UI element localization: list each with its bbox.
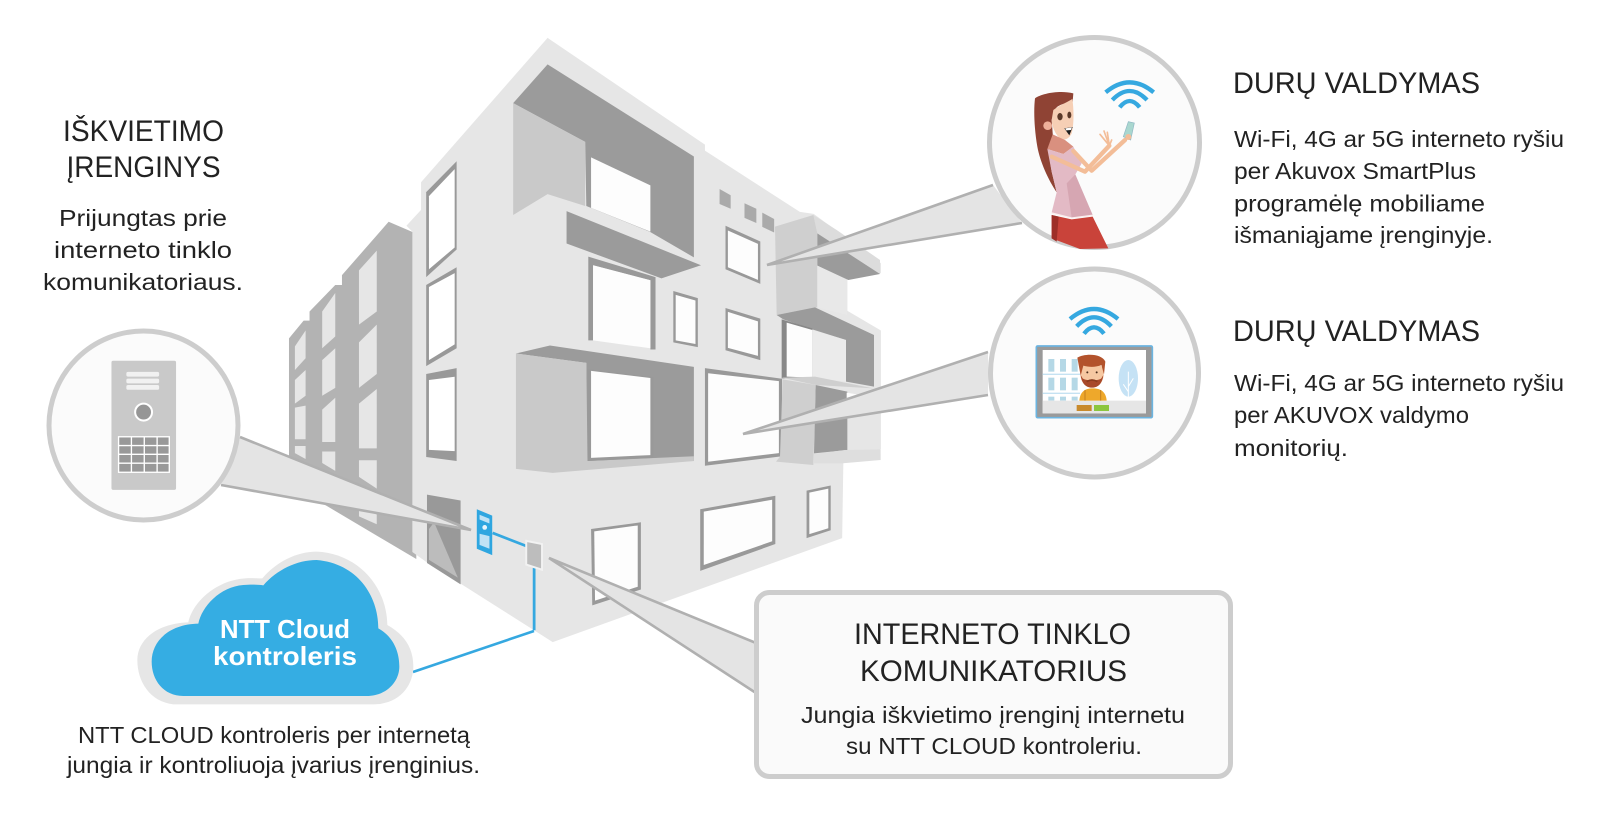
monitor frame and screen [1036, 346, 1152, 418]
right side balconies [775, 215, 881, 465]
heading: call device [63, 114, 224, 184]
heading: door control by monitor: DURŲ VALDYMAS [1233, 315, 1480, 348]
circle: woman with smartphone [990, 38, 1200, 249]
pointer: communicator callout [549, 558, 756, 693]
building illustration [289, 38, 881, 642]
description: NTT Cloud controller: NTT CLOUD kontroleris per internetą [78, 722, 470, 748]
ground floor windows [591, 486, 831, 605]
blue wiring inside building [493, 533, 534, 630]
description: call device: Prijungtas prie [59, 205, 227, 231]
small vents [720, 189, 774, 232]
line from building to cloud [413, 631, 534, 672]
description: call device: interneto tinklo [54, 237, 232, 263]
pointer: door intercom callout [221, 437, 471, 530]
description: door control by app: išmaniąjame įrenginyje. [1234, 222, 1493, 248]
description: door control by app: per Akuvox SmartPlus [1234, 158, 1476, 184]
circle: video monitor [990, 269, 1198, 477]
panel: internet communicator [756, 592, 1230, 776]
description: door control by app: programėlę mobiliame [1234, 190, 1485, 216]
background building [1043, 374, 1080, 393]
description: door control by monitor: per AKUVOX valdymo [1234, 402, 1469, 428]
heading: internet communicator: KOMUNIKATORIUS [860, 655, 1127, 688]
icon: woman holding phone with wifi [1034, 82, 1154, 249]
cloud label: NTT Cloud [220, 614, 350, 644]
description: door control by app [1234, 126, 1564, 248]
icon: door intercom [111, 361, 176, 490]
heading: call device: ĮRENGINYS [66, 151, 220, 184]
description: door control by monitor: Wi-Fi, 4G ar 5G interneto ryšiu [1234, 370, 1564, 396]
description: internet communicator [801, 702, 1185, 759]
top [1047, 147, 1093, 218]
cloud blue fill [152, 560, 399, 696]
description: internet communicator: Jungia iškvietimo įrenginį internetu [801, 702, 1185, 728]
description: call device: komunikatoriaus. [43, 269, 243, 295]
large window [705, 368, 782, 466]
skirt [1052, 215, 1108, 249]
heading: call device: IŠKVIETIMO [63, 114, 224, 148]
left column windows [426, 161, 457, 461]
description: door control by monitor [1234, 370, 1564, 461]
phone [1123, 122, 1134, 140]
pointer: monitor callout [743, 352, 988, 434]
tree [1119, 360, 1138, 397]
icon: indoor monitor [1036, 346, 1152, 418]
icon: wifi signal [1070, 309, 1118, 334]
description: call device [43, 205, 243, 295]
description: NTT Cloud controller: jungia ir kontroliuoja įvarius įrenginius. [66, 752, 480, 778]
heading: internet communicator: INTERNETO TINKLO [854, 618, 1131, 651]
heading: internet communicator [854, 618, 1131, 688]
neck and scarf [1047, 134, 1073, 154]
man on screen [1079, 388, 1107, 401]
face [1052, 99, 1074, 140]
bottom bar with buttons [1043, 401, 1146, 413]
entrance door [427, 495, 461, 584]
arms and hands [1052, 131, 1125, 172]
upper balcony [513, 64, 701, 278]
cloud label: kontroleris [213, 641, 357, 671]
left wing of building [289, 222, 416, 559]
circle: door intercom device [49, 331, 238, 520]
description: NTT Cloud controller [66, 722, 480, 778]
description: internet communicator: su NTT CLOUD kontroleriu. [846, 733, 1142, 759]
pointer: smartphone callout [767, 185, 1022, 265]
main building body [406, 38, 881, 642]
icon: wifi signal [1106, 82, 1154, 107]
description: door control by monitor: monitorių. [1234, 435, 1348, 461]
cloud outer border [137, 552, 413, 704]
hair [1034, 92, 1073, 192]
cloud label [213, 614, 357, 671]
middle windows [588, 226, 760, 360]
description: door control by app: Wi-Fi, 4G ar 5G interneto ryšiu [1234, 126, 1564, 152]
cloud: NTT Cloud controller [137, 552, 413, 704]
lower balcony [516, 346, 694, 473]
heading: door control by app: DURŲ VALDYMAS [1233, 67, 1480, 100]
small blue door intercom [477, 509, 492, 555]
small internet communicator box [526, 541, 542, 570]
